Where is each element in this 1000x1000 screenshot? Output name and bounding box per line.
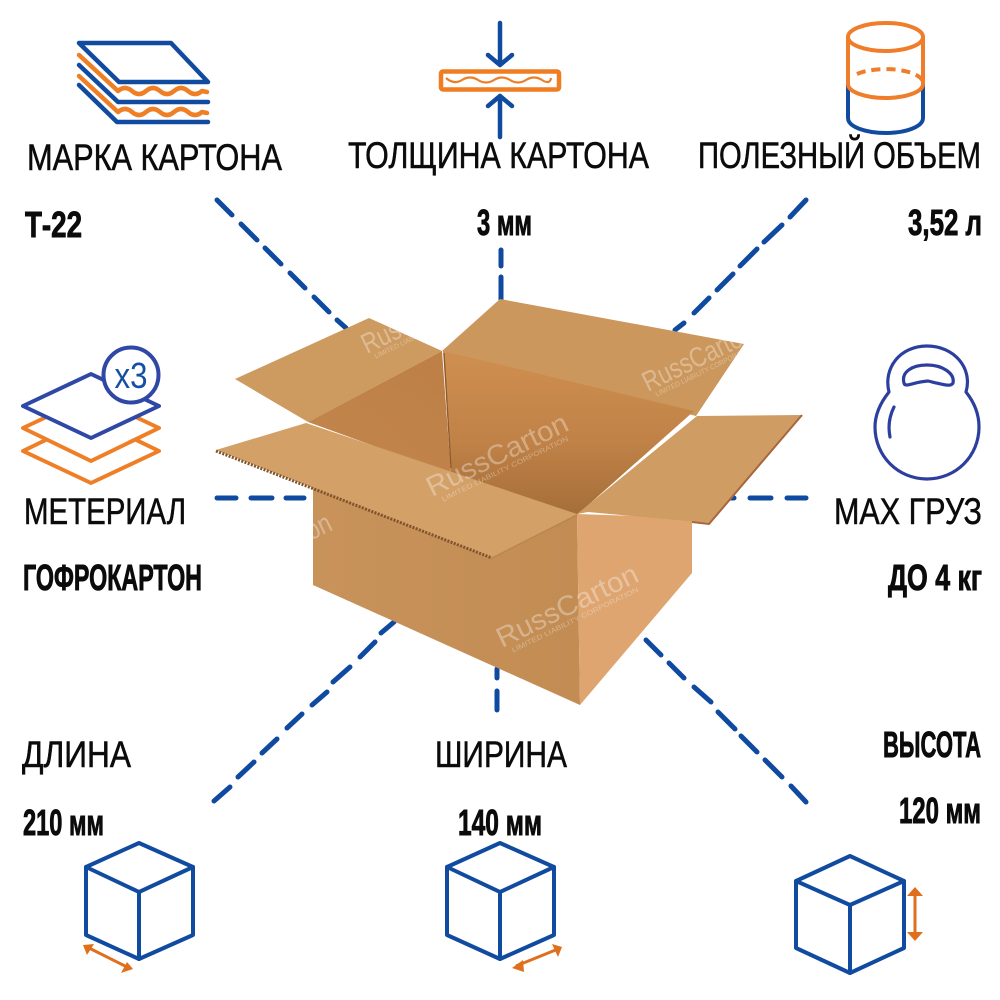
heading: material: МЕТЕРИАЛ	[24, 491, 186, 532]
value: gofrokarton: ГОФРОКАРТОН	[23, 557, 202, 598]
central cardboard box	[215, 279, 802, 705]
interior left wall	[308, 351, 451, 474]
arrow: height	[907, 887, 923, 941]
front flap corrugated edge	[216, 451, 492, 558]
watermarks: RussCarton	[215, 507, 336, 587]
heading: shirina: ШИРИНА	[435, 734, 567, 775]
icon: material layers x3: x3	[114, 355, 148, 396]
watermarks: RussCarton	[421, 407, 573, 502]
watermarks: LIMITED LIABILITY CORPORATION	[441, 436, 570, 503]
arrow: length	[83, 944, 133, 973]
heading: dlina: ДЛИНА	[22, 734, 131, 775]
value: 3 mm: 3 мм	[477, 202, 532, 243]
icon: cube length	[83, 843, 193, 973]
icon: cylinder volume	[848, 23, 923, 133]
watermarks: RussCarton	[356, 279, 477, 359]
interior back wall	[443, 351, 694, 515]
value: 210 mm: 210 мм	[23, 802, 104, 843]
value: 140 mm: 140 мм	[458, 802, 542, 843]
watermarks: LIMITED LIABILITY CORPORATION	[511, 587, 640, 654]
dashed connector lines	[214, 200, 806, 802]
value: T-22: Т-22	[25, 204, 82, 245]
right flap	[577, 415, 802, 523]
inner corner crease	[444, 353, 451, 468]
watermarks: LIMITED LIABILITY CORPORATION	[655, 344, 757, 398]
arrow: width	[512, 944, 562, 972]
right flap corrugated edge	[692, 415, 802, 524]
heading: marka kartona: МАРКА КАРТОНА	[27, 137, 282, 178]
watermarks	[215, 279, 760, 658]
front flap	[216, 423, 577, 558]
icon: cube width	[447, 843, 562, 972]
watermarks: RussCarton	[491, 558, 643, 653]
back left flap	[235, 318, 442, 422]
icon: corrugated layers	[79, 43, 208, 122]
icon: thickness	[441, 23, 559, 137]
heading: tolshchina kartona: ТОЛЩИНА КАРТОНА	[348, 135, 649, 176]
back flap	[442, 299, 744, 416]
watermarks: RussCarton	[637, 317, 758, 397]
icon: material layers x3	[23, 348, 159, 483]
icon: kettlebell weight	[875, 346, 979, 479]
front face	[313, 480, 580, 705]
watermarks: LIMITED LIABILITY CORPORATION	[374, 306, 476, 360]
right face	[577, 514, 692, 705]
icon: cube height	[796, 856, 923, 973]
